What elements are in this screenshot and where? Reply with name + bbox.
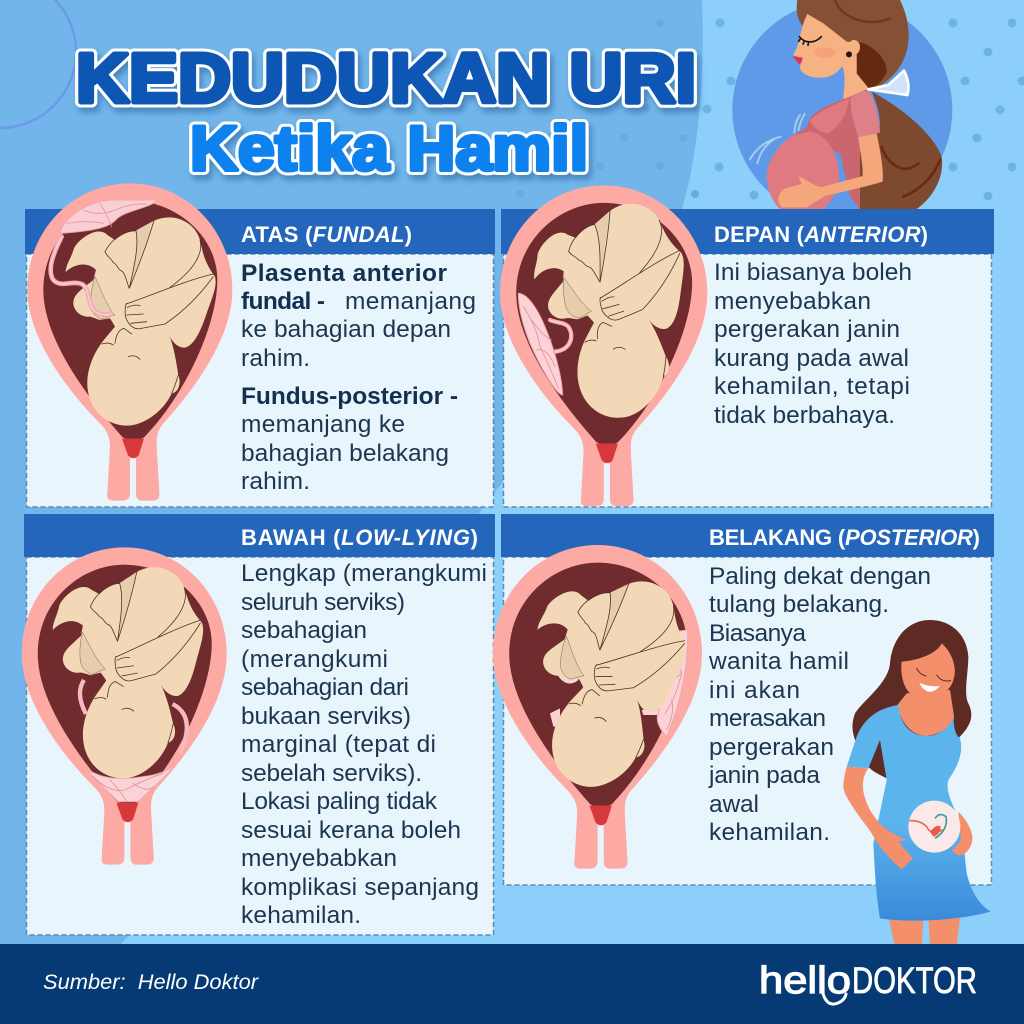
text block: [241, 560, 487, 929]
logo: hello doktor: hello: [759, 960, 851, 1002]
title: [76, 39, 696, 184]
text block: seluruh serviks): [241, 589, 405, 616]
text block: kurang pada awal: [714, 345, 909, 372]
illustration: smiling woman in blue dress: [843, 620, 991, 947]
illustration: pregnant woman in profile: [732, 0, 952, 220]
text block: merasakan: [709, 705, 826, 732]
heading: BAWAH (LOW-LYING): [241, 525, 478, 550]
text block: memanjang: [345, 288, 476, 315]
text block: Biasanya: [709, 620, 806, 647]
panel: bawah (low-lying): [22, 514, 495, 935]
text block: marginal (tepat di: [241, 731, 436, 758]
text block: kehamilan.: [709, 819, 830, 846]
text block: ke bahagian depan: [241, 316, 451, 343]
long hair: [852, 620, 971, 778]
text block: rahim.: [241, 345, 310, 372]
heading: Ketika Hamil: Ketika Hamil: [190, 114, 588, 184]
text block: bahagian belakang: [241, 440, 449, 467]
panel: depan (anterior): [500, 185, 994, 507]
panel body: [26, 557, 494, 935]
face: [901, 643, 955, 698]
belly: [767, 132, 839, 209]
panel body: [504, 254, 992, 507]
text block: tidak berbahaya.: [714, 402, 895, 429]
panel body: [504, 557, 992, 885]
text block: janin pada: [708, 762, 820, 789]
text block: [708, 563, 931, 846]
dress: [793, 89, 880, 209]
text block: kehamilan, tetapi: [714, 373, 910, 400]
text block: Plasenta anterior: [241, 260, 447, 287]
heading: Kedudukan Uri: KEDUDUKAN URI: [76, 39, 696, 117]
panel: belakang (posterior): [493, 514, 994, 885]
arms and hands: [843, 767, 972, 869]
footer bar: [0, 944, 1024, 1024]
movement marks: [750, 114, 805, 163]
heading: Ketika Hamil: Ketika Hamil: [190, 114, 588, 184]
panel header bar: [501, 514, 994, 557]
source credit: Sumber: Hello Doktor: [43, 971, 259, 994]
panel header bar: [25, 209, 495, 254]
diagram: uterus with posterior placenta: [493, 545, 702, 869]
heading: Kedudukan Uri: KEDUDUKAN URI: [76, 39, 696, 117]
text block: sebelah serviks).: [241, 760, 422, 787]
panel body: [26, 254, 494, 507]
neck hair: [857, 42, 887, 91]
text block: pergerakan: [709, 734, 834, 761]
text block: memanjang ke: [241, 411, 405, 438]
blue dress: [847, 705, 991, 921]
logo: hello doktor: DOKTOR: [852, 960, 977, 1001]
panel header bar: [501, 209, 994, 254]
logo: hello doktor: [759, 960, 977, 1004]
blush, lips and closed eye: [793, 37, 836, 64]
hair ribbon: [868, 71, 908, 95]
diagram: uterus with fundal placenta: [27, 183, 232, 501]
text block: awal: [709, 791, 759, 818]
text block: Fundus-posterior -: [241, 383, 458, 410]
background: dots: [516, 18, 1024, 200]
text block: tulang belakang.: [709, 591, 889, 618]
background: outlined arc: [0, 0, 76, 128]
background: darker blue curved shape: [0, 0, 703, 945]
text block: rahim.: [241, 468, 310, 495]
legs: [888, 917, 960, 947]
ponytail: [848, 92, 942, 209]
ear and earring: [846, 40, 860, 57]
diagram: uterus with low-lying placenta: [22, 547, 227, 865]
text block: Lokasi paling tidak: [241, 788, 438, 815]
text block: sebahagian: [241, 617, 367, 644]
blue circle behind woman: [732, 0, 952, 220]
text block: sebahagian dari: [241, 674, 409, 701]
text block: bukaan serviks): [241, 703, 411, 730]
text block: Paling dekat dengan: [709, 563, 931, 590]
text block: sesuai kerana boleh: [241, 817, 461, 844]
text block: [241, 260, 476, 495]
heading: BELAKANG (POSTERIOR): [709, 525, 980, 550]
text block: kehamilan.: [241, 902, 361, 929]
text block: menyebabkan: [714, 288, 871, 315]
panel: atas (fundal): [25, 183, 495, 507]
text block: pergerakan janin: [714, 316, 900, 343]
text block: [714, 259, 912, 429]
panel header bar: [24, 514, 495, 557]
text block: wanita hamil: [708, 648, 849, 675]
heading: DEPAN (ANTERIOR): [714, 222, 928, 247]
neck: [897, 690, 954, 736]
text block: Lengkap (merangkumi: [241, 560, 487, 587]
heading: ATAS (FUNDAL): [241, 222, 412, 247]
womb circle with embryo: [908, 801, 960, 853]
diagram: uterus with anterior placenta: [500, 185, 713, 506]
text block: menyebabkan: [241, 845, 397, 872]
hair top: [797, 0, 909, 89]
arm and hand: [778, 133, 883, 207]
text block: (merangkumi: [241, 646, 388, 673]
text block: Ini biasanya boleh: [714, 259, 912, 286]
face and neck: [793, 14, 870, 100]
text block: komplikasi sepanjang: [241, 874, 479, 901]
text block: fundal -: [241, 288, 325, 315]
sleeve: [850, 91, 880, 137]
eyes and smile: [917, 668, 951, 692]
text block: ini akan: [709, 677, 800, 704]
